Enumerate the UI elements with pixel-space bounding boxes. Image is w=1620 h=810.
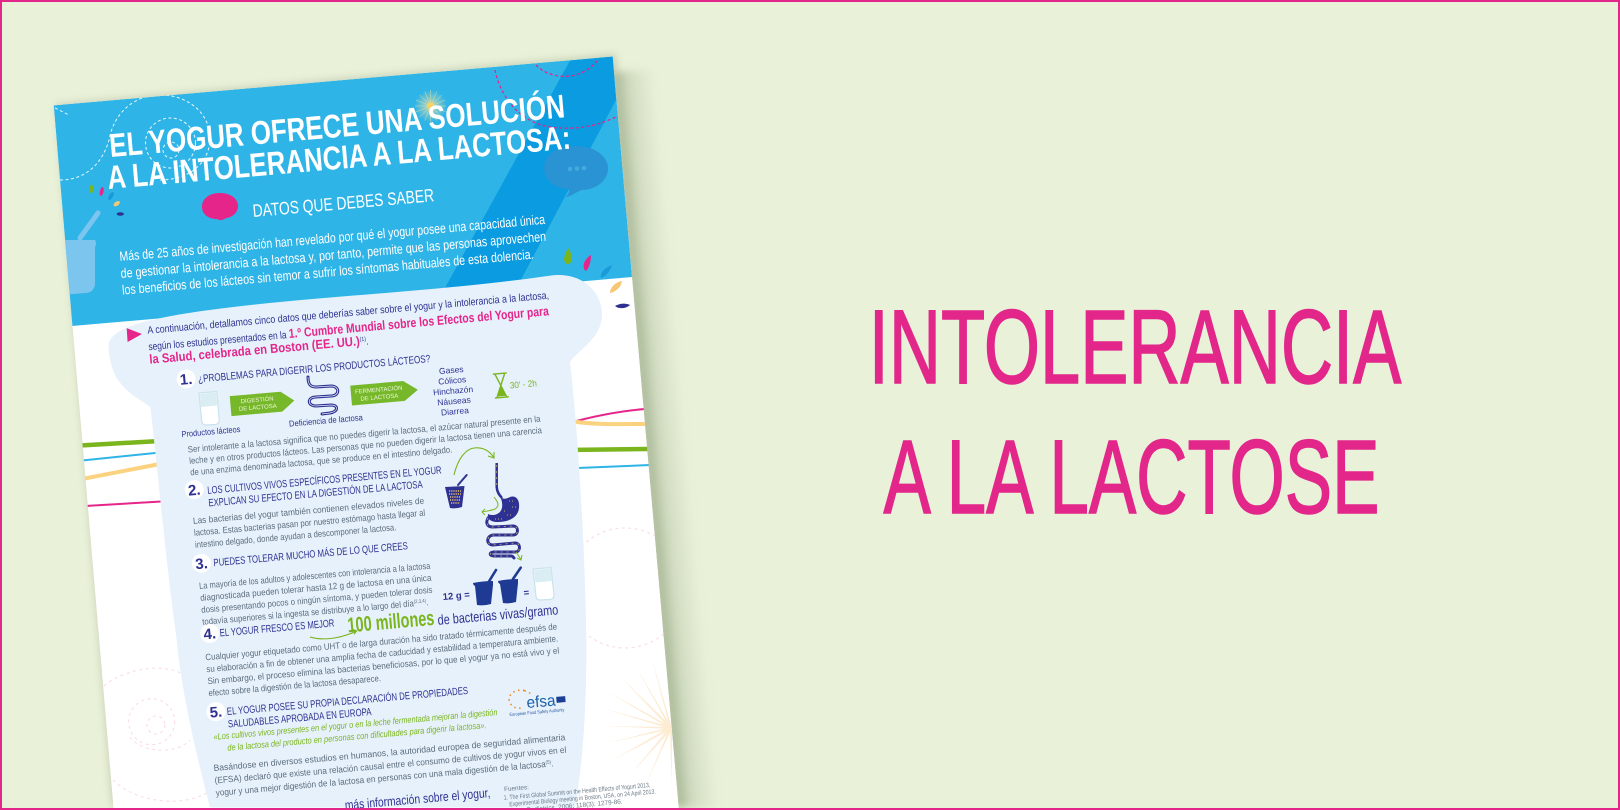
number 1: 1. (179, 371, 193, 389)
number 5: 5. (209, 704, 223, 722)
droplets left (90, 184, 124, 216)
logo: efsa: efsa (526, 693, 556, 712)
lead paragraph: . (366, 336, 369, 348)
arrow: lactose fermentation: DE LACTOSA (360, 393, 399, 403)
paper right shadow (612, 70, 725, 808)
poster paper (54, 56, 679, 810)
paper halo shadow (56, 54, 682, 806)
label: dairy products: Productos lácteos (181, 424, 241, 439)
heading 5 (226, 684, 470, 731)
body text 5: . (551, 758, 554, 769)
figure: yogurt digestion path (445, 448, 522, 560)
body text 3: diagnosticada pueden tolerar hasta 12 g de lactosa en una única (200, 573, 432, 603)
number 2 (184, 479, 205, 500)
intro text: Más de 25 años de investigación han revelado por qué el yogur posee una capacidad única (119, 212, 546, 264)
right title: INTOLERANCIA (869, 289, 1401, 406)
decorative white dashes (55, 95, 210, 180)
body text 5: (EFSA) declaró que existe una relación causal entre el consumo de cultivos de yogur vivos en el (214, 745, 567, 785)
body text 3: La mayoría de los adultos y adolescentes con intolerancia a la lactosa (199, 561, 431, 591)
arrow: lactose digestion (230, 391, 295, 416)
section 4 (199, 593, 563, 698)
number 2: 2. (187, 482, 201, 500)
lead paragraph: la Salud, celebrada en Boston (EE. UU.) (149, 333, 360, 367)
icon: pink speech bubble (202, 193, 238, 220)
icon: stomach (488, 496, 519, 522)
icon: yogurt pot two (498, 568, 521, 603)
body text 3: dosis presentando pocos o ningún síntoma, y pueden tolerar dosis (201, 585, 433, 615)
body text 4: Sin embargo, el proceso elimina las bacterias beneficiosas, por lo que el yogur ya no está vivo y el (207, 645, 560, 686)
body text 1: Ser intolerante a la lactosa significa que no puedes digerir la lactosa, el azúcar natural presente en la (187, 414, 541, 455)
green quote: de la lactosa del producto en personas con dificultades para digerir la lactosa». (227, 720, 487, 753)
body text 4: su elaboración a fin de obtener una amplia fecha de caducidad y estabilidad a temperatura ambiente. (206, 633, 559, 674)
intro text: de gestionar la intolerancia a la lactosa y, por tanto, permite que las personas aprovechen (120, 229, 547, 281)
icon: hourglass (493, 373, 509, 398)
icon: glass of milk (199, 392, 219, 425)
background dashed swirls (104, 528, 685, 801)
symptoms list (431, 363, 476, 418)
decorative pink dashes (495, 60, 616, 128)
lead paragraph: A continuación, detallamos cinco datos que deberías saber sobre el yogur y la intolerancia a la lactosa, (147, 290, 549, 337)
heading 5: EL YOGUR POSEE SU PROPIA DECLARACIÓN DE PROPIEDADES (226, 684, 469, 718)
section 3 (191, 526, 530, 628)
title (103, 87, 572, 196)
arrow: lactose fermentation (350, 380, 419, 406)
header band (54, 56, 632, 326)
body text 2: intestino delgado, donde ayudan a descomponer la lactosa. (195, 522, 397, 550)
number 4 (199, 623, 220, 644)
body text 3 (199, 561, 434, 627)
heading 3: PUEDES TOLERAR MUCHO MÁS DE LO QUE CREES (213, 539, 408, 569)
intro text: los beneficios de los lácteos sin temor a sufrir los síntomas habituales de esta dolencia. (121, 247, 534, 298)
body text 2: Las bacterias del yogur también contienen elevados niveles de (193, 496, 424, 526)
right title (869, 289, 1401, 536)
body text 1: leche y en otros productos lácteos. Las personas que no pueden digerir la lactosa tienen una carencia (189, 425, 542, 466)
arrow: lactose digestion: DE LACTOSA (239, 404, 277, 413)
panel: toast-shaped content area (106, 271, 645, 810)
lead paragraph (146, 290, 552, 367)
icon: dark speech bubble (544, 146, 608, 197)
icon: intestine (308, 377, 338, 414)
body text 1: de una enzima denominada lactosa, que se produce en el intestino delgado. (190, 444, 453, 477)
heading 2: EXPLICAN SU EFECTO EN LA DIGESTIÓN DE LA LACTOSA (208, 478, 423, 509)
icon: yogurt pot one (473, 570, 496, 605)
label: time span: 30' - 2h (509, 378, 537, 390)
icon: sun (415, 90, 447, 122)
body text 5: (5) (545, 760, 552, 766)
icon: small intestine (487, 518, 520, 558)
icon: esophagus (497, 463, 502, 498)
label: lactase deficiency: Deficiencia de lactosa (289, 412, 363, 429)
title: EL YOGUR OFRECE UNA SOLUCIÓN (108, 87, 566, 164)
right title: A LA LACTOSE (884, 419, 1380, 536)
icon: second glass of milk (533, 568, 554, 600)
symptoms list: Náuseas (437, 395, 471, 407)
body text 5: Basándose en diversos estudios en humanos, la autoridad europea de seguridad alimentaria (213, 732, 566, 773)
sources: Fuentes: (504, 784, 529, 793)
body text 2: lactosa. Estas bacterias pasan por nuestro estómago hasta llegar al (194, 508, 426, 538)
heading 2: LOS CULTIVOS VIVOS ESPECÍFICOS PRESENTES EN EL YOGUR (207, 463, 442, 497)
arrow: inside stomach (482, 497, 498, 515)
droplets right (564, 248, 630, 308)
green quote: «Los cultivos vivos presentes en el yogur o en la leche fermentada mejoran la digestión (213, 707, 498, 742)
arrow: exit (516, 552, 522, 560)
heading 5: SALUDABLES APROBADA EN EUROPA (228, 706, 372, 731)
section 5 (206, 672, 571, 798)
arrow: to 100 millones (310, 629, 357, 640)
lead paragraph: según los estudios presentados en la 1.º Cumbre Mundial sobre los Efectos del Yogur para (148, 303, 550, 353)
background colour lines (80, 409, 650, 506)
body text 3: todavía superiores si la ingesta se distribuye a lo largo del día (202, 595, 448, 627)
logo: efsa (507, 686, 567, 717)
title: A LA INTOLERANCIA A LA LACTOSA: (106, 119, 572, 196)
section 2 (184, 459, 447, 550)
number 3: 3. (195, 555, 209, 573)
body text 3: (2,3,4) (413, 598, 427, 605)
heading 1: ¿PROBLEMAS PARA DIGERIR LOS PRODUCTOS LÁCTEOS? (198, 352, 431, 385)
intro text (118, 212, 549, 298)
sunburst (602, 658, 672, 787)
body text 4 (205, 622, 561, 698)
sources: 1. The First Global Summit on the Health Effects of Yogurt 2013, (503, 782, 651, 802)
number 3 (191, 553, 212, 574)
body text 4: Cualquier yogur etiquetado como UHT o de larga duración ha sido tratado térmicamente después de (205, 622, 557, 662)
number 4: 4. (203, 625, 217, 643)
heading 4: EL YOGUR FRESCO ES MEJOR (219, 617, 335, 639)
symptoms list: Gases (439, 364, 464, 376)
body text 1 (187, 414, 543, 477)
body text 2 (193, 496, 427, 550)
body text 5: yogur y una mejor digestión de la lactosa en personas con una mala digestión de la lactosa (215, 756, 579, 798)
icon: yogurt cup (65, 210, 100, 294)
arrow: lactose fermentation: FERMENTACIÓN (355, 385, 403, 396)
section 1 (176, 339, 543, 478)
equation sign: = (523, 587, 530, 599)
symptoms list: Diarrea (441, 405, 469, 417)
symptoms list: Cólicos (438, 374, 467, 387)
body text 4: efecto sobre la digestión de la lactosa desaparece. (208, 673, 381, 698)
body text 5 (213, 732, 568, 798)
number 5 (206, 701, 226, 722)
green quote (213, 707, 499, 754)
logo: efsa: European Food Safety Authority (509, 707, 565, 717)
stat: 100 millones: 100 millones (347, 607, 435, 637)
equation label: 12 g: 12 g = (442, 590, 471, 603)
symptoms list: Hinchazón (433, 384, 474, 397)
number 1 (176, 369, 196, 389)
sources (503, 773, 657, 810)
diagonal dark stripe (440, 56, 616, 297)
arrow: lactose digestion: DIGESTIÓN (240, 395, 274, 405)
subtitle: DATOS QUE DEBES SABER (252, 185, 435, 221)
lead paragraph: (1) (359, 337, 366, 343)
poster sheet (50, 56, 685, 810)
rotated poster content (89, 85, 657, 810)
icon: pink triangle (126, 327, 143, 342)
stat label: de bacterias vivas/gramo (437, 601, 559, 628)
arrow: yogurt to stomach (454, 448, 494, 475)
body text 3: . (426, 597, 429, 607)
icon: yogurt pot with cultures (445, 475, 467, 508)
sources: Experimental Biology meeting in Boston, USA, on 24 April 2013. (509, 789, 656, 808)
heading 2 (207, 463, 443, 509)
